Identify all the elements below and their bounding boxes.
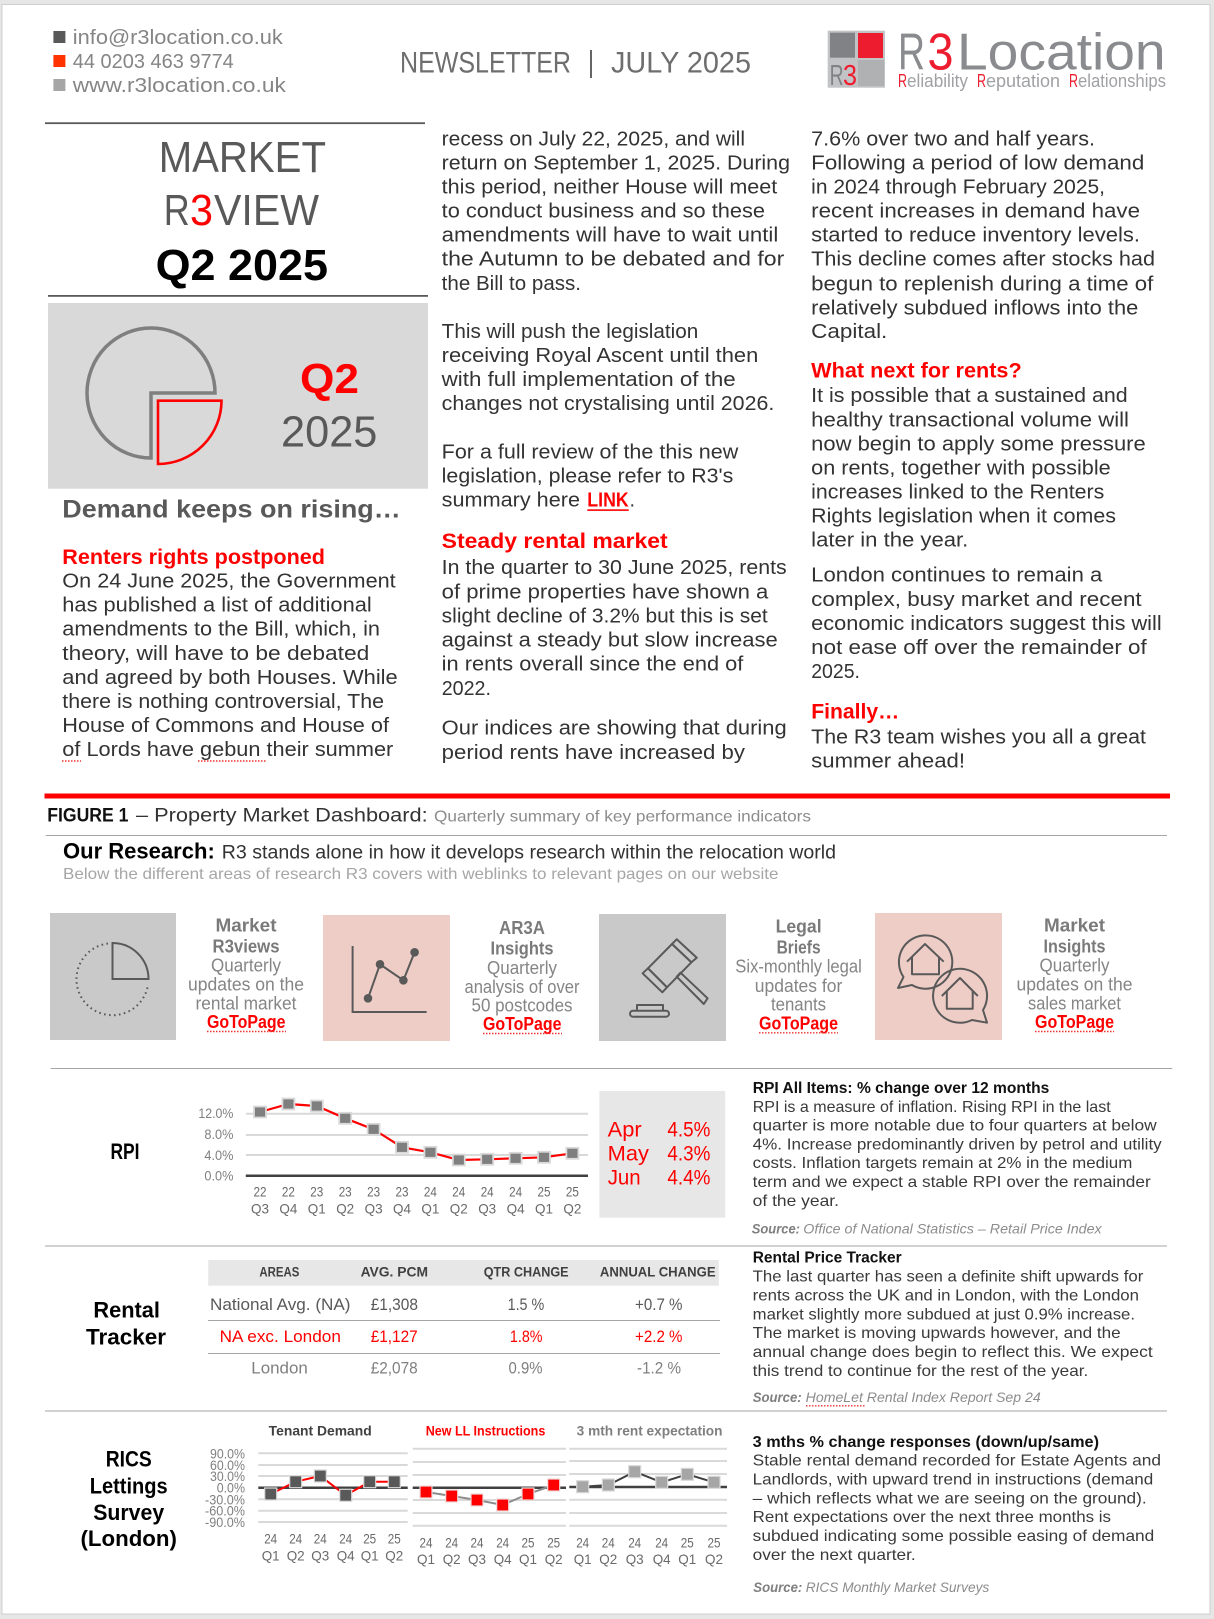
text block: Steady rental market: against a steady but slow increase (442, 629, 778, 651)
panel: AR3A Insights: 50 postcodes (472, 996, 572, 1016)
logo: R3Location: elationships (1078, 71, 1166, 91)
chart: New LL Instructions: Q3 (468, 1551, 486, 1567)
text block: Steady rental market: of prime properties have shown a (442, 581, 769, 603)
text block: RPI commentary: 4%. Increase predominantly driven by petrol and utility (753, 1136, 1162, 1154)
chart: Tenant Demand: 25 (388, 1530, 401, 1546)
heading: Figure 1 dashboard: FIGURE 1 (47, 806, 129, 827)
heading: Our Research: Below the different areas of research R3 covers with weblinks to relevant pages on our website (63, 866, 779, 883)
chart: RPI line chart: Q2 (336, 1200, 354, 1216)
panel: AR3A Insights (323, 915, 580, 1041)
logo: R3Location: 3 (928, 23, 954, 81)
chart: Tenant Demand: Q1 (361, 1548, 379, 1564)
text block: RPI commentary: of the year. (753, 1193, 839, 1210)
text block: Steady rental market: 2022. (442, 678, 491, 700)
text block: What next for rents: London continues to remain a (811, 565, 1103, 587)
logo: R3Location: R (898, 71, 907, 91)
text block: What next for rents: economic indicators suggest this will (811, 613, 1162, 635)
label: RICS Lettings Survey (London): Lettings (90, 1473, 168, 1498)
contact details (53, 27, 287, 97)
chart: RPI line chart: Q3 (478, 1200, 496, 1216)
contact details: info@r3location.co.uk (73, 27, 284, 49)
text block: RICS survey commentary: Stable rental demand recorded for Estate Agents and (753, 1453, 1161, 1470)
chart: RPI line chart: 24 (481, 1184, 494, 1200)
text block: RPI commentary: term and we expect a stable RPI over the remainder (753, 1174, 1151, 1191)
text block: RICS survey commentary: subdued indicating some possible easing of demand (753, 1528, 1154, 1545)
chart: New LL Instructions: 24 (470, 1534, 484, 1550)
chart: RPI line chart: 23 (367, 1184, 380, 1200)
title: Market R3view Q2 2025 (45, 122, 428, 297)
logo: R3Location: 3 (843, 60, 857, 92)
label: RICS Lettings Survey (London): Survey (93, 1500, 165, 1525)
chart: New LL Instructions: Q2 (443, 1551, 461, 1567)
text block: Rental Price Tracker commentary: The last quarter has seen a definite shift upwards for (753, 1269, 1144, 1286)
chart: 3 mth rent expectation: 24 (602, 1534, 615, 1550)
chart: RPI line chart: Q3 (251, 1200, 269, 1216)
panel: Legal Briefs: updates for (755, 976, 842, 996)
label: RICS Lettings Survey (London) (80, 1447, 177, 1551)
panel: Market Insights: Market (1044, 916, 1105, 936)
chart: New LL Instructions: Q1 (519, 1551, 537, 1567)
panel: Legal Briefs (599, 914, 862, 1041)
table: rental price tracker: 1.8% (510, 1327, 542, 1346)
chart: New LL Instructions: New LL Instructions (426, 1424, 545, 1439)
text block: Renters rights postponed: and agreed by both Houses. While (62, 667, 398, 689)
text block: Finally: The R3 team wishes you all a great (811, 726, 1146, 748)
text block: Rental Price Tracker commentary: HomeLet Rental Index Report Sep 24 (806, 1389, 1041, 1405)
text block: What next for rents: later in the year. (811, 529, 968, 551)
text block: RICS survey commentary (753, 1434, 1161, 1595)
chart: RPI line chart: Q1 (535, 1200, 553, 1216)
newsletter heading: JULY 2025 (611, 47, 751, 80)
title: Market R3view Q2 2025: VIEW (214, 186, 319, 235)
text block: RICS survey commentary: RICS Monthly Market Surveys (806, 1579, 989, 1595)
panel: AR3A Insights: GoToPage (483, 1014, 562, 1034)
text block: Renters rights postponed: Renters rights postponed (62, 545, 325, 569)
panel: Legal Briefs: GoToPage (759, 1013, 838, 1033)
table: rental price tracker: NA exc. London (220, 1327, 341, 1346)
callout: RPI monthly values: 4.3% (667, 1143, 710, 1166)
title: Market R3view Q2 2025: MARKET (159, 133, 326, 182)
chart: Tenant Demand: 24 (314, 1530, 327, 1546)
panel: AR3A Insights: Insights (490, 938, 554, 958)
text block: RPI commentary: RPI is a measure of inflation. Rising RPI in the last (753, 1099, 1111, 1116)
callout: RPI monthly values: 4.5% (667, 1119, 710, 1142)
chart: Tenant Demand: 24 (339, 1530, 352, 1546)
newsletter heading: NEWSLETTER (400, 47, 571, 80)
panel: Market R3views: updates on the (188, 975, 304, 995)
chart: RPI line chart: Q2 (563, 1200, 582, 1216)
chart: 3 mth rent expectation: Q1 (574, 1551, 592, 1567)
text block: Rental Price Tracker commentary: market slightly more subdued at just 0.9% increase. (753, 1306, 1135, 1324)
text block: Column two, legislation timing (441, 128, 790, 511)
chart: New LL Instructions (413, 1424, 566, 1567)
chart: RPI line chart: 25 (538, 1184, 551, 1200)
chart: RPI line chart: 25 (566, 1184, 579, 1200)
panel: Market Insights: updates on the (1016, 975, 1132, 995)
chart: Tenant Demand: Q4 (337, 1548, 355, 1564)
chart: Tenant Demand: Tenant Demand (269, 1424, 372, 1439)
panel: Legal Briefs: Briefs (777, 937, 821, 957)
text block: Column two, legislation timing: this period, neither House will meet (442, 176, 778, 198)
panel: Market Insights: Quarterly (1040, 956, 1110, 976)
text block: RICS survey commentary: over the next quarter. (753, 1547, 916, 1564)
text block: Rental Price Tracker commentary: annual change does begin to reflect this. We expect (753, 1344, 1153, 1361)
text block: Steady rental market: In the quarter to 30 June 2025, rents (442, 557, 787, 579)
icon: quarter pie dotted (76, 943, 148, 1015)
text block: RPI commentary: Source: (752, 1220, 800, 1236)
text block: Rental Price Tracker commentary: The market is moving upwards however, and the (753, 1325, 1121, 1342)
text block: What next for rents (811, 358, 1162, 683)
text block: Column two, legislation timing: the Autumn to be debated and for (442, 248, 785, 270)
text block: Column three, demand and inventory: begun to replenish during a time of (811, 273, 1154, 295)
chart: New LL Instructions: 25 (522, 1534, 535, 1550)
callout: RPI monthly values: May (608, 1143, 650, 1166)
text block: Steady rental market: Our indices are showing that during (442, 718, 787, 740)
chart: RPI line chart: Q4 (507, 1200, 525, 1216)
panel: Market Insights: Insights (1044, 936, 1106, 956)
label: Rental Tracker: Tracker (86, 1324, 166, 1349)
chart: 3 mth rent expectation: Q1 (678, 1551, 696, 1567)
chart: Tenant Demand: -60.0% (205, 1503, 245, 1519)
text block: Column two, legislation timing: amendments will have to wait until (442, 224, 778, 246)
text block: What next for rents: increases linked to the Renters (811, 481, 1104, 503)
icon: line chart (353, 946, 427, 1012)
contact details: 44 0203 463 9774 (73, 51, 234, 73)
logo: R3Location: R (898, 23, 925, 81)
panel: AR3A Insights: Quarterly (487, 958, 557, 978)
text block: What next for rents: now begin to apply some pressure (811, 433, 1146, 455)
chart: RPI line chart: Q3 (365, 1200, 383, 1216)
text block: Column two, legislation timing: to conduct business and so these (442, 200, 765, 222)
text block: Column two, legislation timing: . (630, 489, 635, 511)
chart: RPI line chart: 22 (254, 1184, 267, 1200)
text block: Steady rental market (442, 529, 787, 764)
panel: Legal Briefs: Legal (776, 917, 822, 937)
chart: Tenant Demand: Q2 (287, 1548, 305, 1564)
text block: Column two, legislation timing: This will push the legislation (442, 321, 698, 343)
title: Market R3view Q2 2025: 3 (190, 186, 213, 235)
text block: Column two, legislation timing: the Bill to pass. (442, 273, 581, 295)
panel: Market Insights: GoToPage (1035, 1012, 1114, 1032)
contact details: www.r3location.co.uk (72, 75, 287, 97)
text block: Renters rights postponed: of Lords have gebun their summer (62, 739, 394, 761)
chart: New LL Instructions: 25 (547, 1534, 560, 1550)
table: rental price tracker: National Avg. (NA) (210, 1295, 350, 1314)
text block: Column three, demand and inventory: Capital. (811, 321, 887, 343)
chart: 3 mth rent expectation: 25 (708, 1534, 721, 1550)
panel: Market R3views: rental market (196, 993, 296, 1013)
text block: What next for rents: not ease off over the remainder of (811, 637, 1147, 659)
chart: New LL Instructions: 24 (420, 1534, 433, 1550)
chart: RPI line chart: 0.0% (204, 1168, 233, 1184)
text block: Column three, demand and inventory: started to reduce inventory levels. (811, 224, 1140, 246)
chart: Tenant Demand: -90.0% (205, 1514, 245, 1530)
panel: AR3A Insights: analysis of over (464, 977, 580, 997)
text block: Renters rights postponed: there is nothing controversial, The (62, 691, 384, 713)
chart: New LL Instructions: Q1 (417, 1551, 435, 1567)
chart: Tenant Demand: 30.0% (210, 1468, 245, 1484)
label: Rental Tracker: Rental (93, 1297, 160, 1322)
panel: Legal Briefs: tenants (771, 995, 826, 1015)
icon: speech bubbles with houses (898, 935, 987, 1023)
text block: What next for rents: on rents, together with possible (811, 457, 1111, 479)
logo: R3Location: R (1069, 71, 1078, 91)
label: RICS Lettings Survey (London): RICS (106, 1447, 152, 1472)
text block: What next for rents: complex, busy market and recent (811, 589, 1142, 611)
text block: Column two, legislation timing: legislation, please refer to R3's (442, 465, 733, 487)
text block: Rental Price Tracker commentary: rents across the UK and in London, with the London (753, 1288, 1139, 1305)
title: Market R3view Q2 2025: Q2 2025 (156, 241, 328, 290)
text block: What next for rents: Rights legislation when it comes (811, 505, 1116, 527)
table: rental price tracker (208, 1260, 720, 1378)
text block: Column two, legislation timing: with full implementation of the (441, 369, 736, 391)
chart: Tenant Demand: 24 (264, 1530, 277, 1546)
text block: Renters rights postponed (62, 545, 398, 761)
text block: Column three, demand and inventory: 7.6% over two and half years. (811, 128, 1095, 150)
table: rental price tracker: London (251, 1359, 308, 1378)
chart: RPI line chart: 24 (452, 1184, 465, 1200)
title: Market R3view Q2 2025: R (164, 186, 190, 235)
icon: gavel (630, 939, 708, 1017)
text block: Rental Price Tracker commentary: Rental Price Tracker (753, 1250, 902, 1266)
panel: Q2 2025 pie graphic: Q2 (300, 355, 359, 402)
heading: Our Research (63, 838, 836, 883)
text block: Finally: Finally… (811, 699, 899, 723)
text block: Renters rights postponed: theory, will have to be debated (62, 643, 369, 665)
text block: Column three, demand and inventory: Following a period of low demand (811, 152, 1144, 174)
chart: RPI line chart: 8.0% (204, 1126, 233, 1142)
text block: Rental Price Tracker commentary (753, 1250, 1153, 1406)
text block: What next for rents: healthy transactional volume will (811, 409, 1129, 431)
chart: New LL Instructions: 24 (445, 1534, 458, 1550)
heading: Figure 1 dashboard: – Property Market Dashboard: (136, 806, 428, 827)
chart: Tenant Demand: 90.0% (210, 1445, 245, 1461)
text block: Column three, demand and inventory: relatively subdued inflows into the (811, 297, 1138, 319)
text block: Steady rental market: in rents overall since the end of (442, 653, 744, 675)
chart: RPI line chart (198, 1098, 588, 1216)
chart: Tenant Demand (205, 1424, 408, 1564)
callout: RPI monthly values (599, 1091, 725, 1218)
table: rental price tracker: £1,127 (371, 1327, 418, 1346)
chart: RPI line chart: Q1 (421, 1200, 440, 1216)
logo: R3Location: Location (957, 23, 1166, 81)
chart: 3 mth rent expectation: 24 (628, 1534, 641, 1550)
newsletter heading (400, 47, 751, 80)
chart: RPI line chart: 12.0% (198, 1105, 233, 1121)
text block: Column two, legislation timing: summary here (442, 489, 580, 511)
chart: 3 mth rent expectation: Q2 (705, 1551, 723, 1567)
text block: Column three, demand and inventory (811, 128, 1155, 343)
table: rental price tracker: 1.5 % (508, 1295, 544, 1314)
chart: RPI line chart: Q4 (279, 1200, 298, 1216)
logo: R3Location: eliability (907, 71, 968, 91)
panel: Market R3views: Market (216, 916, 276, 936)
logo: R3Location: eputation (986, 71, 1060, 91)
chart: RPI line chart: Q2 (450, 1200, 468, 1216)
table: rental price tracker: £2,078 (371, 1359, 418, 1378)
table: rental price tracker: ANNUAL CHANGE (600, 1265, 716, 1280)
panel: Q2 2025 pie graphic: 2025 (281, 408, 377, 457)
text block: Finally (811, 699, 1146, 772)
text block: Renters rights postponed: On 24 June 2025, the Government (62, 571, 396, 593)
text block: RPI commentary (752, 1080, 1162, 1236)
text block: Column two, legislation timing: recess on July 22, 2025, and will (442, 128, 745, 150)
label: Rental Tracker (86, 1297, 166, 1349)
chart: RPI line chart: 24 (424, 1184, 437, 1200)
icon: pie chart with red quarter (87, 328, 222, 464)
heading: Our Research: Our Research: (63, 838, 215, 863)
table: rental price tracker: AVG. PCM (361, 1265, 428, 1280)
panel: AR3A Insights: AR3A (499, 918, 545, 938)
text block: Steady rental market: slight decline of 3.2% but this is set (442, 605, 768, 627)
text block: RPI commentary: RPI All Items: % change over 12 months (753, 1080, 1049, 1097)
chart: RPI line chart: 4.0% (204, 1147, 233, 1163)
text block: RICS survey commentary: 3 mths % change responses (down/up/same) (753, 1434, 1099, 1451)
heading: Our Research: R3 stands alone in how it develops research within the relocation world (222, 842, 836, 863)
callout: RPI monthly values: 4.4% (667, 1167, 710, 1190)
chart: New LL Instructions: 24 (496, 1534, 509, 1550)
logo: R3Location (828, 23, 1166, 92)
text block: What next for rents: 2025. (811, 661, 860, 683)
text block: Column two, legislation timing: For a full review of the this new (442, 441, 739, 463)
text block: What next for rents: It is possible that a sustained and (811, 385, 1128, 407)
subtitle: Demand keeps on rising: Demand keeps on rising… (62, 495, 401, 523)
label: RPI: RPI (110, 1139, 140, 1164)
panel: Market R3views: Quarterly (211, 956, 281, 976)
text block: Column three, demand and inventory: This decline comes after stocks had (811, 248, 1155, 270)
table: rental price tracker: 0.9% (508, 1359, 542, 1378)
panel: Market Insights: sales market (1028, 993, 1121, 1013)
chart: 3 mth rent expectation: 25 (681, 1534, 694, 1550)
chart: Tenant Demand: 24 (289, 1530, 302, 1546)
text block: Renters rights postponed: amendments to the Bill, which, in (62, 619, 380, 641)
table: rental price tracker: +0.7 % (635, 1295, 682, 1314)
chart: Tenant Demand: 25 (363, 1530, 376, 1546)
text block: Column three, demand and inventory: recent increases in demand have (811, 200, 1140, 222)
text block: RPI commentary: costs. Inflation targets remain at 2% in the medium (753, 1155, 1132, 1172)
table: rental price tracker: AREAS (259, 1265, 299, 1280)
chart: New LL Instructions: Q4 (494, 1551, 512, 1567)
chart: New LL Instructions: Q2 (545, 1551, 563, 1567)
text block: Rental Price Tracker commentary: this trend to continue for the rest of the year. (753, 1363, 1088, 1380)
chart: RPI line chart: Q1 (308, 1200, 326, 1216)
chart: RPI line chart: 23 (396, 1184, 409, 1200)
heading: Figure 1 dashboard: Quarterly summary of key performance indicators (434, 809, 811, 826)
chart: RPI line chart: 23 (310, 1184, 323, 1200)
chart: 3 mth rent expectation: 3 mth rent expectation (577, 1424, 722, 1439)
chart: 3 mth rent expectation: Q2 (599, 1551, 617, 1567)
panel: Market R3views (50, 913, 304, 1040)
text block: Steady rental market: Steady rental market (442, 529, 668, 553)
chart: Tenant Demand: Q2 (385, 1548, 403, 1564)
table: rental price tracker: QTR CHANGE (484, 1265, 569, 1280)
text block: RICS survey commentary: Source: (753, 1579, 802, 1595)
chart: 3 mth rent expectation: 24 (655, 1534, 668, 1550)
logo: R3Location: R (830, 60, 844, 92)
text block: Column two, legislation timing: receiving Royal Ascent until then (442, 345, 758, 367)
text block: Finally: summer ahead! (811, 750, 965, 772)
chart: Tenant Demand: Q3 (311, 1548, 329, 1564)
text block: Column three, demand and inventory: in 2024 through February 2025, (811, 176, 1105, 198)
panel: Legal Briefs: Six-monthly legal (735, 957, 862, 977)
heading: Figure 1 dashboard (47, 806, 811, 827)
callout: RPI monthly values: Apr (608, 1119, 642, 1142)
chart: RPI line chart: 23 (339, 1184, 352, 1200)
chart: 3 mth rent expectation: Q4 (653, 1551, 671, 1567)
chart: Tenant Demand: Q1 (262, 1548, 280, 1564)
text block: Rental Price Tracker commentary: Source: (753, 1389, 802, 1405)
panel: Q2 2025 pie graphic (48, 303, 428, 489)
text block: Steady rental market: period rents have increased by (442, 742, 745, 764)
text block: Renters rights postponed: has published a list of additional (62, 595, 372, 617)
text block: RICS survey commentary: – which reflects what we are seeing on the ground). (753, 1490, 1147, 1508)
panel: Market R3views: GoToPage (207, 1012, 286, 1032)
panel: Market R3views: R3views (212, 936, 280, 956)
chart: 3 mth rent expectation: Q3 (626, 1551, 644, 1567)
text block: RPI commentary: quarter is more notable due to four quarters at below (753, 1118, 1157, 1135)
text block: What next for rents: What next for rents? (811, 358, 1022, 382)
chart: RPI line chart: Q4 (393, 1200, 411, 1216)
table: rental price tracker: -1.2 % (637, 1359, 681, 1378)
text block: RICS survey commentary: Rent expectations over the next three months is (753, 1509, 1111, 1526)
label: RICS Lettings Survey (London): (London) (80, 1526, 177, 1551)
chart: 3 mth rent expectation (569, 1424, 727, 1567)
chart: RPI line chart: 22 (282, 1184, 295, 1200)
table: rental price tracker: £1,308 (371, 1295, 418, 1314)
chart: Tenant Demand: 0.0% (217, 1480, 245, 1496)
logo: R3Location: R (977, 71, 986, 91)
callout: RPI monthly values: Jun (608, 1167, 641, 1190)
table: rental price tracker: +2.2 % (635, 1327, 682, 1346)
chart: Tenant Demand: -30.0% (205, 1491, 245, 1507)
chart: Tenant Demand: 60.0% (210, 1457, 245, 1473)
chart: RPI line chart: 24 (509, 1184, 522, 1200)
text block: RICS survey commentary: Landlords, with upward trend in instructions (demand (753, 1472, 1153, 1489)
text block: Renters rights postponed: House of Commons and House of (62, 715, 389, 737)
panel: Market Insights (875, 913, 1132, 1040)
text block: Column two, legislation timing: LINK (587, 489, 629, 511)
chart: 3 mth rent expectation: 24 (576, 1534, 589, 1550)
text block: RPI commentary: Office of National Statistics – Retail Price Index (803, 1220, 1103, 1236)
text block: Column two, legislation timing: changes not crystalising until 2026. (442, 393, 774, 415)
text block: Column two, legislation timing: return on September 1, 2025. During (442, 152, 790, 174)
